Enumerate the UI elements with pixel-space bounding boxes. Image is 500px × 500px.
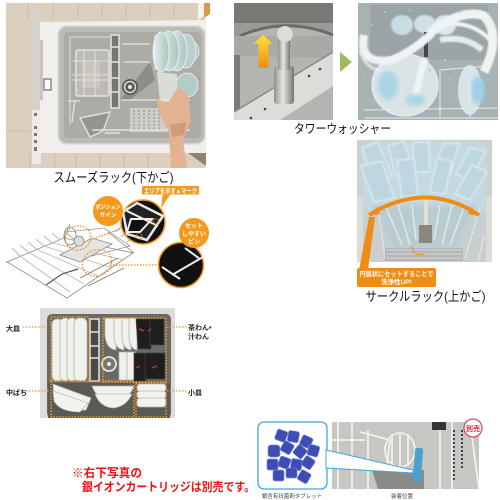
callout: arc arrow [357,198,479,287]
label: tea and soup bowls: 汁わん [188,332,209,341]
callout: easy-set pin: しやすい [182,230,206,238]
rack illustration [6,224,134,298]
callout: position sign: サイン [100,212,117,219]
caption: circle rack: サークルラック(上かご) [366,289,486,304]
caption: tower washer: タワーウォッシャー [294,122,391,136]
caption: mounting position: 装着位置 [391,492,413,500]
zoom circle: position sign [121,200,165,244]
panel: mounting position photo [332,422,479,489]
caption: smooth rack: スムーズラック(下かご) [54,170,174,185]
callout: area mark [142,186,199,208]
panel: dish loading photo [40,308,175,418]
label: mid bowl: 中ばち [6,388,27,397]
lower bowls [48,383,170,418]
panel: rack diagram [6,186,209,298]
callout: area mark: エリアを示す▲マーク [144,186,197,195]
note: cartridge sold separately [72,465,255,494]
divider rack [90,319,99,381]
note: cartridge sold separately: 銀イオンカートリッジは別売です。 [82,479,255,494]
bowls [153,31,199,97]
leader lines [23,327,187,391]
label: tea and soup bowls [188,323,212,341]
large plates [52,318,87,381]
panel: smooth rack photo [6,3,210,168]
badge: sold separately: 別売 [466,424,480,433]
callout: arc arrow: 円弧状にセットすることで [360,269,434,278]
callout: position sign [93,196,123,226]
icon: up arrow [253,35,273,68]
callout: position sign: ポジション [96,203,121,211]
panel: circle rack photo [357,140,492,262]
bowls [105,318,137,380]
label: tea and soup bowls: 茶わん• [188,323,212,332]
callout: easy-set pin [179,218,209,248]
dotted zones [51,317,166,417]
badge: sold separately [464,419,482,437]
label: small plate: 小皿 [188,388,202,397]
zoom circle: easy-set pin [158,242,204,288]
lower rack left basket [68,37,110,137]
panel: tower washer nozzle photo [234,3,333,120]
hand [156,87,191,168]
caption: tablet: 銀含有抗菌剤タブレット [262,492,322,500]
callout: arc arrow: 洗浄性UP! [381,277,412,286]
dotted highlights [61,222,158,281]
arrow: green [340,52,352,72]
callout: easy-set pin: セット [185,223,203,230]
callout: easy-set pin: ピン [188,239,200,246]
label: large plate: 大皿 [6,324,20,333]
callout: pointer to mounting position [326,450,413,473]
panel: tower washer spray photo [358,3,500,120]
note: cartridge sold separately: ※右下写真の [72,465,142,480]
panel: antibacterial tablets [258,422,327,489]
black bowls [134,319,165,381]
